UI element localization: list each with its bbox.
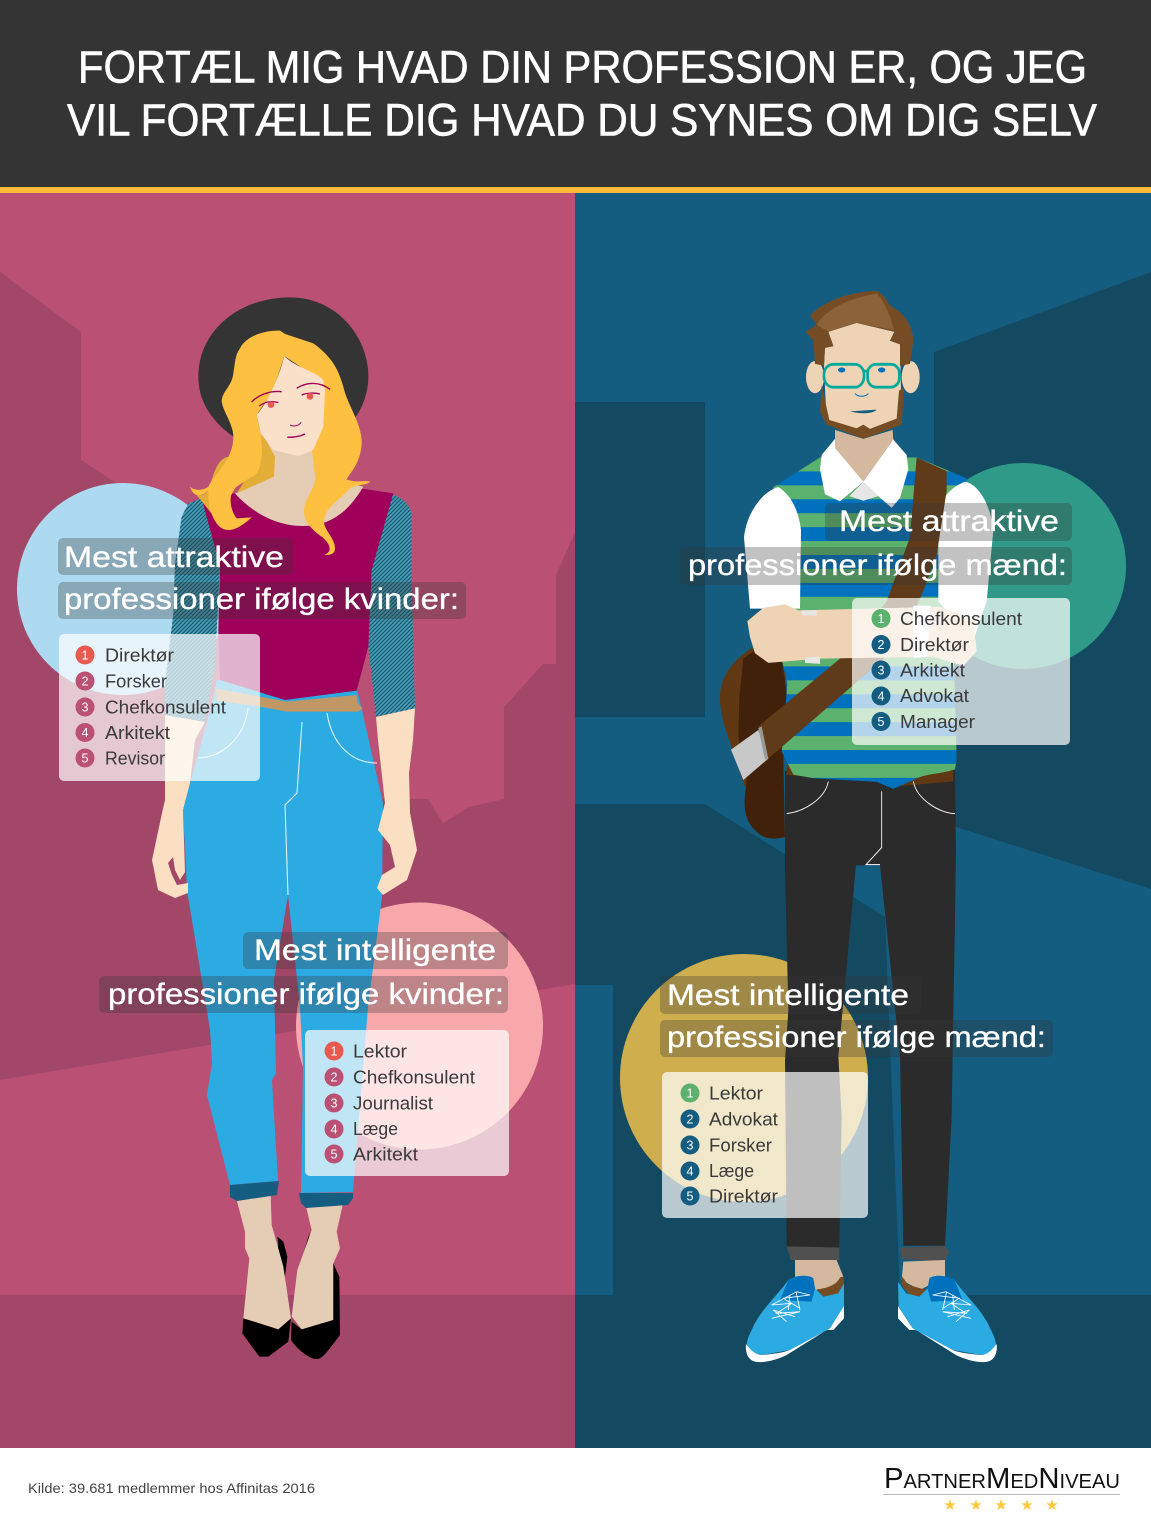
heading: Mest intelligente (254, 934, 496, 967)
ranked list: Advokat (709, 1108, 778, 1130)
circle: intelligent women (296, 902, 543, 1150)
right shoe (898, 1260, 997, 1362)
strap (758, 457, 947, 759)
ranked list: 2 (878, 638, 885, 652)
ranked list: Advokat (900, 685, 969, 706)
hair left (190, 331, 300, 530)
ranked list (305, 1030, 509, 1176)
woman jeans cuffs (230, 1181, 353, 1208)
heading (680, 503, 1072, 585)
circle: attractive men (920, 463, 1126, 669)
buckle (731, 726, 768, 780)
man upper body (720, 291, 993, 839)
ranked list: Manager (900, 711, 975, 732)
ranked list: 1 (331, 1044, 338, 1058)
circle: intelligent men (620, 954, 868, 1202)
logo: ★ (1020, 1497, 1034, 1514)
heading (58, 538, 466, 619)
source note: Kilde: 39.681 medlemmer hos Affinitas 2016 (28, 1480, 315, 1496)
panel: mest intelligente ifølge kvinder (99, 932, 509, 1176)
ranked list: Lektor (709, 1082, 763, 1104)
ranked list: Chefkonsulent (900, 608, 1022, 629)
woman jeans (183, 680, 383, 1193)
ranked list: 5 (331, 1148, 338, 1162)
beard (820, 385, 904, 439)
logo: ★ (943, 1497, 957, 1514)
heading: professioner ifølge mænd: (667, 1021, 1046, 1054)
heading: professioner ifølge kvinder: (108, 978, 504, 1011)
panel: left pink background (0, 193, 575, 1448)
ranked list: Forsker (709, 1134, 772, 1156)
circle: attractive women (17, 483, 229, 695)
panel: mest attraktive ifølge kvinder (58, 538, 466, 781)
hat (198, 297, 368, 437)
ranked list: Journalist (353, 1092, 433, 1114)
ranked list: Arkitekt (353, 1144, 418, 1164)
ranked list: 2 (331, 1070, 338, 1084)
man trousers (785, 765, 956, 1262)
ranked list: 3 (878, 664, 885, 678)
logo: ★ (1045, 1497, 1059, 1514)
shirt (202, 488, 393, 700)
footer background (0, 1448, 1151, 1527)
figure: man (720, 291, 997, 1362)
forearm (747, 604, 977, 666)
sleeves (165, 498, 220, 722)
ranked list: 5 (82, 752, 89, 766)
man facial features (838, 367, 885, 413)
heading: Mest intelligente (667, 979, 909, 1012)
ranked list: Læge (709, 1160, 754, 1181)
ears (806, 361, 920, 393)
title: FORTÆL MIG HVAD DIN PROFESSION ER, OG JEG (78, 42, 1087, 92)
ranked list: Direktør (900, 634, 969, 655)
hair shadow right (237, 430, 275, 493)
woman legs and shoes (237, 1195, 343, 1359)
heading: Mest attraktive (839, 505, 1059, 538)
ranked list: Læge (353, 1118, 398, 1139)
ranked list: 3 (331, 1096, 338, 1110)
woman jeans seams (198, 708, 377, 895)
hair shadow (190, 457, 240, 520)
logo: ★ (969, 1497, 983, 1514)
panel: mest intelligente ifølge mænd (660, 976, 1053, 1218)
ranked list (662, 1072, 868, 1218)
ranked list: Direktør (105, 644, 174, 666)
heading (660, 976, 1053, 1057)
sweater vest (773, 457, 967, 789)
ranked list: 1 (687, 1086, 694, 1100)
bag (720, 648, 787, 839)
heading: Mest attraktive (64, 541, 284, 574)
hair (806, 291, 913, 366)
ranked list: 5 (687, 1190, 694, 1204)
logo: PARTNERMEDNIVEAU (884, 1463, 1120, 1495)
chest skin (235, 413, 363, 526)
woman arms (152, 708, 417, 898)
ranked list: 1 (878, 612, 885, 626)
ranked list: 4 (878, 690, 885, 704)
belt (216, 688, 363, 712)
ranked list: Arkitekt (900, 660, 965, 680)
ranked list: 1 (82, 648, 89, 662)
face (257, 356, 325, 456)
glasses (824, 364, 899, 387)
ranked list: Revisor (105, 748, 165, 768)
ranked list: 4 (82, 726, 89, 740)
figure: woman (152, 297, 417, 1359)
ranked list (852, 598, 1070, 745)
header band (0, 0, 1151, 193)
collar (820, 439, 908, 508)
ranked list: 4 (687, 1164, 694, 1178)
heading: professioner ifølge mænd: (688, 549, 1067, 582)
ranked list: 3 (687, 1138, 694, 1152)
ranked list: Chefkonsulent (353, 1066, 475, 1088)
ranked list: 2 (687, 1112, 694, 1126)
ranked list: 4 (331, 1122, 338, 1136)
logo (883, 1463, 1120, 1514)
left shoe (746, 1260, 844, 1362)
right sleeve (938, 482, 993, 641)
man shoes (746, 1260, 997, 1362)
ranked list: 3 (82, 700, 89, 714)
ranked list: Chefkonsulent (105, 696, 226, 718)
title (67, 42, 1097, 146)
neck (835, 430, 893, 484)
woman facial features (252, 383, 330, 437)
panel: mest attraktive ifølge mænd (680, 503, 1072, 745)
ranked list (59, 634, 260, 781)
hair right (283, 333, 371, 555)
ranked list: Direktør (709, 1186, 778, 1206)
title: VIL FORTÆLLE DIG HVAD DU SYNES OM DIG SELV (67, 94, 1097, 146)
woman upper body (165, 297, 415, 722)
ranked list: Arkitekt (105, 722, 170, 743)
heading (99, 932, 508, 1013)
ranked list: Forsker (105, 670, 167, 692)
panel: right blue background (575, 193, 1151, 1448)
face (824, 323, 902, 439)
heading: professioner ifølge kvinder: (64, 583, 459, 616)
left sleeve (744, 487, 801, 609)
ranked list: 5 (878, 715, 885, 729)
ranked list: 2 (82, 674, 89, 688)
logo: ★ (994, 1497, 1008, 1514)
ranked list: Lektor (353, 1040, 407, 1062)
